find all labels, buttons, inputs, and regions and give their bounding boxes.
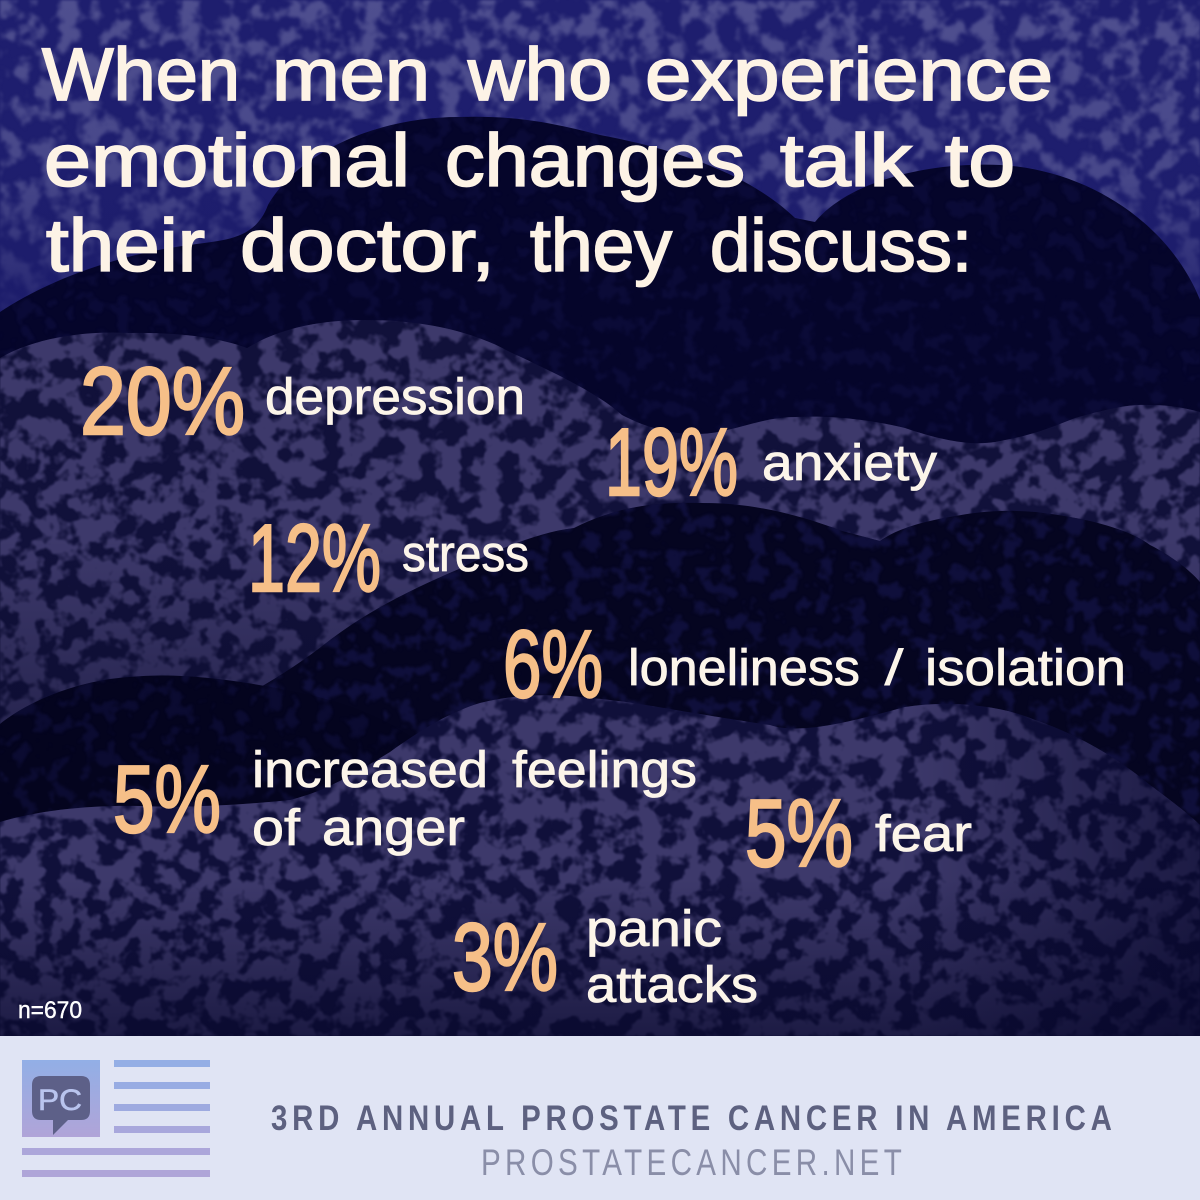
stat: 5% increased feelings of anger: of <box>252 799 301 856</box>
stat: 6% loneliness / isolation: / <box>884 639 905 696</box>
title <box>42 33 1053 287</box>
footer heading: 3RD ANNUAL PROSTATE CANCER IN AMERICA <box>271 1099 1112 1138</box>
title: doctor, <box>240 204 495 287</box>
stat: 20% depression <box>80 348 525 455</box>
title: experience <box>645 33 1053 116</box>
stat: 3% panic attacks: attacks <box>586 956 758 1013</box>
stat: 5% fear: 5% <box>745 780 853 887</box>
stat: 6% loneliness / isolation: isolation <box>925 639 1126 696</box>
background: lower lavender hills <box>0 690 1200 1036</box>
title: When <box>42 33 240 116</box>
stat: 12% stress: stress <box>402 525 529 582</box>
stat: 5% increased feelings of anger <box>113 741 697 856</box>
title: who <box>467 33 612 116</box>
stat: 5% increased feelings of anger: feelings <box>512 741 697 798</box>
title: to <box>945 119 1015 202</box>
stat: 12% stress <box>248 505 529 612</box>
background: lower left dark hill <box>0 676 394 815</box>
title: men <box>272 33 430 116</box>
stat: 6% loneliness / isolation: loneliness <box>628 639 860 696</box>
stat: 5% fear: fear <box>875 805 972 862</box>
stat: 5% increased feelings of anger: 5% <box>113 746 221 853</box>
stat: 19% anxiety <box>605 409 938 516</box>
stat: 3% panic attacks: 3% <box>452 904 558 1011</box>
title: discuss: <box>710 204 972 287</box>
stat: 6% loneliness / isolation: 6% <box>503 611 603 718</box>
stat: 6% loneliness / isolation <box>503 611 1126 718</box>
title: changes <box>445 119 745 202</box>
stat: 20% depression: 20% <box>80 348 245 455</box>
stat: 19% anxiety: 19% <box>605 409 738 516</box>
title: talk <box>780 119 913 202</box>
icon: ProstateCancer.net flag logo: PC <box>38 1084 82 1117</box>
stat: 5% increased feelings of anger: increased <box>252 741 488 798</box>
footer website: PROSTATECANCER.NET <box>481 1143 902 1184</box>
sample size note: n=670 <box>18 997 82 1024</box>
background: dark mountain range <box>0 116 1200 444</box>
background: upper lavender hills <box>0 320 1200 724</box>
stat: 5% increased feelings of anger: anger <box>322 799 465 856</box>
stat: 20% depression: depression <box>265 368 525 425</box>
icon: ProstateCancer.net flag logo <box>22 1060 210 1177</box>
title: they <box>530 204 672 287</box>
stat: 5% fear <box>745 780 972 887</box>
footer panel <box>0 1036 1200 1200</box>
stat: 19% anxiety: anxiety <box>762 434 938 491</box>
stat: 3% panic attacks <box>452 900 758 1013</box>
background: middle dark hills <box>263 503 1200 825</box>
stat: 3% panic attacks: panic <box>586 900 722 957</box>
title: emotional <box>44 119 410 202</box>
title: their <box>46 204 205 287</box>
stat: 12% stress: 12% <box>248 505 381 612</box>
